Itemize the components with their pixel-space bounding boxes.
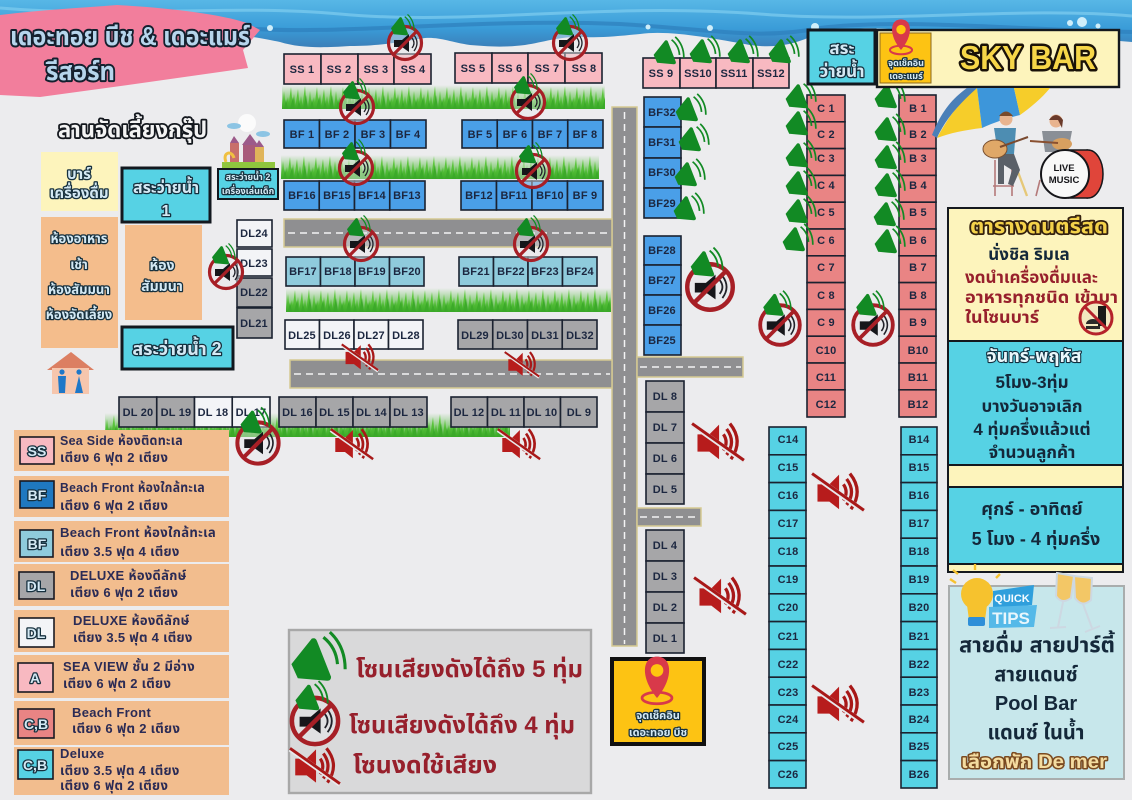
- rooms: BF 17-20: BF18: [324, 266, 352, 278]
- rooms: C 14-26: C18: [778, 546, 798, 558]
- icons: 4 pm noise limit markers: [210, 14, 893, 464]
- legend: BF six foot: เตียง 6 ฟุต 2 เตียง: [60, 498, 168, 513]
- legend: DL 3.5 foot: DL: [27, 625, 46, 641]
- panel: sound zone legend: [289, 630, 591, 793]
- rooms: DL 16-13: DL 16: [282, 407, 313, 419]
- rooms: B 1-12: B 5: [909, 207, 927, 219]
- panel: seminar room: [125, 225, 202, 320]
- rooms: SS 1-4: SS 1: [290, 64, 314, 76]
- rooms: DL 8-5: DL 6: [653, 453, 677, 465]
- rooms: SS 5-8: SS 8: [572, 63, 596, 75]
- icons: loud zone speakers above SS rooms: [654, 36, 799, 64]
- rooms: DL 24-21: DL22: [240, 287, 268, 299]
- rooms: SS 9-12: SS10: [684, 68, 712, 80]
- rooms: B 14-26: B23: [909, 687, 929, 699]
- tips text: สายดื่ม สายปาร์ตี้: [959, 630, 1116, 657]
- rooms: C 1-12: C 1: [817, 103, 835, 115]
- rooms: SS 5-8: SS 5: [461, 63, 485, 75]
- panel: pool 1: 1: [162, 203, 171, 220]
- rooms: B 14-26: B16: [909, 490, 929, 502]
- rooms: BF 12-9: BF10: [536, 190, 564, 202]
- rooms: DL 8-5: DL 7: [653, 422, 677, 434]
- panel: pool 1: สระว่ายน้ำ: [133, 176, 199, 197]
- rooms: BF 28-25: [644, 236, 681, 355]
- check-in De Mer: [880, 19, 931, 83]
- rooms: C 14-26: C24: [778, 714, 799, 726]
- rooms: DL 12-9: DL 10: [527, 407, 557, 419]
- rooms: BF 16-13: BF16: [288, 190, 316, 202]
- schedule fri-sun: [948, 487, 1123, 564]
- rooms: C 14-26: C22: [778, 659, 798, 671]
- rooms: C 1-12: C 3: [817, 153, 835, 165]
- legend: C,B deluxe: [14, 746, 229, 795]
- rooms: BF 1-4: BF 3: [361, 129, 385, 141]
- legend: DL six foot: DELUXE ห้องดีลักษ์: [70, 568, 187, 583]
- rooms: DL 29-32: DL31: [531, 330, 559, 342]
- panel: restaurant and function rooms: เช้า: [70, 257, 88, 272]
- no sound: โซนงดใช้เสียง: [353, 751, 497, 779]
- panel: quick tips: [949, 564, 1124, 779]
- rooms: BF 21-24: BF23: [531, 266, 559, 278]
- rooms: C 1-12: C11: [816, 372, 836, 384]
- rooms: DL 29-32: [458, 320, 597, 349]
- rooms: DL 4-1: DL 3: [653, 571, 677, 583]
- icons: loud zone speakers beside BF rooms: [674, 94, 709, 220]
- panel: swimming pool top: ว่ายน้ำ: [819, 59, 865, 81]
- title banner: เดอะทอย บีช & เดอะแมร์: [10, 21, 250, 51]
- rooms: BF 16-13: BF13: [393, 190, 421, 202]
- rooms: C 14-26: [769, 427, 806, 788]
- rooms: BF 28-25: BF27: [648, 275, 676, 287]
- rooms: B 1-12: B 3: [909, 153, 927, 165]
- legend: SS: [14, 430, 229, 471]
- quick tips badge: TIPS: [992, 609, 1030, 628]
- rooms: BF 16-13: BF14: [358, 190, 387, 202]
- schedule mon-thu: จำนวนลูกค้า: [989, 443, 1075, 463]
- panel: check-in The Toy Beach: จุดเช็คอิน: [636, 710, 680, 722]
- panel: pool 2 with playground: สระว่ายน้ำ 2: [226, 170, 270, 182]
- check-in De Mer: เดอะแมร์: [889, 71, 923, 81]
- panel: drinks bar: [41, 152, 118, 211]
- loud until 11 pm: โซนเสียงดังได้ถึง 5 ทุ่ม: [356, 655, 583, 684]
- icon: beach umbrella: [932, 88, 1050, 138]
- panel: pool 2 with playground: เครื่องเล่นเด็ก: [222, 184, 274, 196]
- legend: C,B beach front: เตียง 6 ฟุต 2 เตียง: [72, 721, 180, 736]
- legend: A: A: [30, 670, 40, 686]
- rooms: DL 24-21: DL23: [240, 258, 268, 270]
- rooms: BF 17-20: BF17: [289, 266, 317, 278]
- rooms: DL 4-1: DL 2: [653, 602, 677, 614]
- rooms: SS 9-12: SS12: [757, 68, 785, 80]
- legend: A: เตียง 6 ฟุต 2 เตียง: [63, 676, 171, 691]
- rooms: C 14-26: C17: [778, 518, 798, 530]
- legend: SS: เตียง 6 ฟุต 2 เตียง: [60, 450, 168, 465]
- rooms: C 1-12: C 8: [817, 290, 835, 302]
- rooms: C 14-26: C25: [778, 741, 798, 753]
- panel: pool 2: [122, 327, 233, 369]
- legend: DL 3.5 foot: [14, 610, 229, 652]
- rooms: DL 29-32: DL29: [461, 330, 489, 342]
- rooms: BF 17-20: BF20: [393, 266, 421, 278]
- rooms: SS 9-12: SS11: [720, 68, 748, 80]
- schedule heading: ตารางดนตรีสด: [970, 216, 1108, 238]
- legend: A: [14, 655, 229, 698]
- panel: pool 2 with playground: [218, 169, 278, 199]
- panel: drinks bar: บาร์: [67, 166, 91, 183]
- rooms: BF 12-9: [461, 181, 603, 210]
- rooms: B 1-12: B11: [908, 372, 928, 384]
- rooms: DL 25-28: DL28: [392, 330, 420, 342]
- panel: live music schedule: [948, 208, 1123, 572]
- rooms: B 14-26: B20: [909, 602, 929, 614]
- rooms: SS 1-4: [284, 54, 431, 84]
- rooms: DL 12-9: DL 12: [454, 407, 484, 419]
- rooms: B 14-26: B22: [909, 659, 929, 671]
- rooms: DL 16-13: DL 15: [319, 407, 350, 419]
- legend: C,B deluxe: เตียง 3.5 ฟุต 4 เตียง: [60, 763, 180, 778]
- legend: BF six foot: [14, 476, 229, 517]
- icon: playground: [222, 114, 275, 168]
- legend: BF six foot: BF: [28, 487, 47, 503]
- rooms: BF 32-29: BF30: [648, 167, 676, 179]
- rooms: BF 32-29: BF29: [648, 198, 676, 210]
- rooms: B 14-26: B26: [909, 769, 929, 781]
- schedule fri-sun: ศุกร์ - อาทิตย์: [981, 499, 1083, 520]
- rooms: DL 25-28: DL25: [288, 330, 316, 342]
- rooms: B 1-12: B10: [908, 345, 928, 357]
- rooms: DL 8-5: [646, 381, 684, 504]
- tips text: แดนซ์ ในน้ำ: [987, 718, 1085, 744]
- legend: C,B deluxe: เตียง 6 ฟุต 2 เตียง: [60, 778, 168, 793]
- rooms: BF 28-25: BF28: [648, 245, 676, 257]
- icon: restroom: [47, 352, 94, 394]
- rooms: B 1-12: B12: [908, 399, 928, 411]
- icon: live music band: LIVE: [1053, 163, 1075, 174]
- rooms: BF 12-9: BF 9: [573, 190, 597, 202]
- rooms: BF 12-9: BF12: [465, 190, 493, 202]
- rooms: C 14-26: C26: [778, 769, 798, 781]
- rooms: DL 16-13: DL 13: [393, 407, 424, 419]
- icons: no sound zones: [331, 344, 864, 723]
- rooms: C 1-12: C10: [816, 345, 836, 357]
- rooms: B 1-12: B 2: [909, 129, 927, 141]
- rooms: B 14-26: B14: [909, 434, 930, 446]
- rooms: DL 20-17: DL 19: [161, 407, 191, 419]
- rooms: BF 21-24: BF22: [497, 266, 525, 278]
- panel: sky bar banner: SKY BAR: [960, 39, 1096, 76]
- rooms: BF 32-29: [644, 97, 681, 218]
- rooms: DL 20-17: DL 20: [123, 407, 153, 419]
- schedule mon-thu: 5โมง-3ทุ่ม: [995, 372, 1069, 393]
- rooms: BF 28-25: BF25: [648, 335, 676, 347]
- icon: no food: [1080, 302, 1112, 334]
- rooms: B 1-12: B 4: [909, 180, 928, 192]
- panel: swimming pool top: สระ: [829, 39, 855, 58]
- panel: check-in The Toy Beach: [612, 657, 704, 744]
- rooms: BF 5-8: [462, 120, 603, 148]
- rooms: SS 5-8: SS 6: [498, 63, 522, 75]
- water background: [0, 0, 1132, 47]
- rooms: DL 12-9: DL 11: [491, 407, 521, 419]
- rooms: C 14-26: C23: [778, 687, 798, 699]
- panel: swimming pool top: [808, 30, 875, 84]
- rooms: BF 17-20: [286, 257, 424, 286]
- rooms: DL 12-9: DL 9: [567, 407, 591, 419]
- rooms: B 14-26: B21: [909, 631, 929, 643]
- rooms: B 14-26: B15: [909, 462, 929, 474]
- legend: BF 3.5 foot: [14, 521, 229, 562]
- tips text: สายแดนซ์: [994, 664, 1078, 686]
- rooms: BF 16-13: BF15: [323, 190, 351, 202]
- rooms: BF 1-4: BF 2: [325, 129, 349, 141]
- panel: restaurant and function rooms: ห้องจัดเลี้ยง: [46, 305, 112, 322]
- rooms: SS 1-4: SS 2: [327, 64, 351, 76]
- loud until 10 pm: [292, 681, 575, 744]
- rooms: DL 4-1: [646, 530, 684, 653]
- rooms: C 1-12: C 2: [817, 129, 835, 141]
- rooms: SS 9-12: SS 9: [649, 68, 673, 80]
- rooms: DL 25-28: DL26: [323, 330, 351, 342]
- rooms: B 14-26: B18: [909, 546, 929, 558]
- grass strips: [105, 85, 611, 437]
- rooms: C 1-12: C 5: [817, 207, 835, 219]
- rooms: BF 5-8: BF 8: [573, 129, 597, 141]
- title banner: [0, 5, 260, 97]
- panel: seminar room: สัมมนา: [141, 278, 183, 294]
- legend: C,B beach front: Beach Front: [72, 705, 152, 720]
- panel: pool 1: [122, 168, 210, 222]
- rooms: BF 5-8: BF 7: [538, 129, 562, 141]
- legend: BF 3.5 foot: BF: [28, 536, 47, 552]
- rooms: BF 28-25: BF26: [648, 305, 676, 317]
- rooms: SS 5-8: [455, 53, 602, 83]
- rooms: B 14-26: B24: [909, 714, 930, 726]
- rooms: SS 1-4: SS 4: [401, 64, 426, 76]
- rooms: B 1-12: B 9: [909, 317, 927, 329]
- quick tips badge: QUICK: [994, 593, 1030, 605]
- legend: DL six foot: DL: [27, 578, 46, 594]
- rooms: SS 9-12: [643, 58, 789, 88]
- rooms: BF 32-29: BF32: [648, 107, 676, 119]
- loud until 11 pm: [291, 632, 583, 684]
- panel: drinks bar: เครื่องดื่ม: [49, 182, 109, 202]
- roads: [284, 107, 743, 646]
- legend: DL 3.5 foot: DELUXE ห้องดีลักษ์: [73, 613, 190, 628]
- title banner: รีสอร์ท: [46, 56, 115, 86]
- rooms: DL 24-21: [237, 220, 272, 338]
- legend: BF six foot: Beach Front ห้องใกล้ทะเล: [60, 480, 205, 495]
- rooms: B 14-26: B17: [909, 518, 929, 530]
- rooms: B 14-26: [901, 427, 937, 788]
- legend: A: SEA VIEW ชั้น 2 มีอ่าง: [63, 657, 195, 674]
- rooms: BF 32-29: BF31: [648, 137, 676, 149]
- schedule mon-thu: 4 ทุ่มครึ่งแล้วแต่: [973, 417, 1091, 440]
- legend: C,B beach front: C,B: [24, 716, 48, 732]
- rooms: DL 24-21: DL24: [240, 228, 269, 240]
- legend: SS: SS: [28, 443, 46, 459]
- panel: restaurant and function rooms: ห้องอาหาร: [50, 231, 108, 246]
- legend: C,B deluxe: Deluxe: [60, 746, 104, 761]
- rooms: B 14-26: B19: [909, 574, 929, 586]
- legend: DL 3.5 foot: เตียง 3.5 ฟุต 4 เตียง: [73, 630, 193, 645]
- tips text: [959, 630, 1116, 744]
- panel: room type legend: [14, 430, 229, 795]
- tips highlight: เลือกพัก De mer: [961, 752, 1108, 773]
- rooms: DL 12-9: [451, 397, 597, 427]
- outside food warning: งดนำเครื่องดื่มและ: [965, 265, 1098, 287]
- rooms: C 1-12: C 7: [817, 262, 835, 274]
- rooms: BF 12-9: BF11: [500, 190, 528, 202]
- rooms: B 1-12: B 1: [909, 103, 927, 115]
- rooms: B 14-26: B25: [909, 741, 929, 753]
- rooms: DL 20-17: DL 17: [236, 407, 266, 419]
- legend: DL six foot: เตียง 6 ฟุต 2 เตียง: [70, 585, 178, 600]
- rooms: B 1-12: B 6: [909, 235, 927, 247]
- rooms: C 14-26: C14: [778, 434, 799, 446]
- rooms: B 1-12: B 8: [909, 290, 927, 302]
- outside food warning: อาหารทุกชนิด เข้ามา: [965, 288, 1118, 308]
- quick tips badge: [989, 585, 1037, 628]
- rooms: DL 20-17: [119, 397, 270, 427]
- schedule mon-thu: จันทร์-พฤหัส: [987, 346, 1082, 366]
- rooms: DL 29-32: DL30: [496, 330, 524, 342]
- rooms: DL 24-21: DL21: [240, 318, 268, 330]
- tips text: Pool Bar: [995, 693, 1077, 715]
- loud until 10 pm: โซนเสียงดังได้ถึง 4 ทุ่ม: [349, 711, 575, 740]
- rooms: DL 4-1: DL 1: [653, 633, 677, 645]
- rooms: BF 21-24: BF21: [462, 266, 490, 278]
- outside food warning: ในโซนบาร์: [965, 308, 1039, 327]
- rooms: B 1-12: B 7: [909, 262, 927, 274]
- rooms: DL 29-32: DL32: [566, 330, 594, 342]
- check-in De Mer: จุดเช็คอิน: [888, 58, 924, 68]
- panel: sky bar banner: [877, 19, 1119, 87]
- chill note: นั่งชิล ริมเล: [988, 243, 1070, 264]
- rooms: DL 8-5: DL 8: [653, 391, 677, 403]
- legend: SS: Sea Side ห้องติดทะเล: [60, 433, 183, 448]
- legend: DL six foot: [14, 564, 229, 606]
- legend: C,B beach front: [14, 701, 229, 745]
- rooms: C 1-12: C 9: [817, 317, 835, 329]
- rooms: C 1-12: C 4: [817, 180, 836, 192]
- rooms: BF 1-4: BF 1: [290, 129, 314, 141]
- icons: loud zone speakers beside B rooms: [874, 81, 905, 253]
- rooms: C 14-26: C16: [778, 490, 798, 502]
- legend: C,B deluxe: C,B: [23, 757, 47, 773]
- rooms: BF 1-4: BF 4: [396, 129, 421, 141]
- schedule fri-sun: 5 โมง - 4 ทุ่มครึ่ง: [972, 526, 1100, 550]
- rooms: C 14-26: C21: [778, 631, 798, 643]
- rooms: BF 16-13: [284, 181, 425, 210]
- icons: loud zone speakers beside C rooms: [783, 81, 816, 251]
- heading: banquet court: ลานจัดเลี้ยงกรุ๊ป: [58, 114, 207, 143]
- panel: seminar room: ห้อง: [149, 257, 175, 273]
- rooms: C 14-26: C19: [778, 574, 798, 586]
- icon: live music band: [983, 112, 1103, 198]
- rooms: C 14-26: C15: [778, 462, 798, 474]
- no sound: [290, 748, 497, 785]
- rooms: DL 25-28: [285, 320, 423, 349]
- schedule mon-thu: [948, 341, 1123, 465]
- panel: restaurant and function rooms: [41, 217, 118, 348]
- rooms: DL 25-28: DL27: [357, 330, 385, 342]
- panel: check-in The Toy Beach: เดอะทอย บีช: [629, 727, 687, 739]
- rooms: DL 20-17: DL 18: [198, 407, 228, 419]
- rooms: DL 4-1: DL 4: [653, 540, 678, 552]
- rooms: DL 8-5: DL 5: [653, 484, 677, 496]
- rooms: SS 5-8: SS 7: [535, 63, 559, 75]
- rooms: BF 5-8: BF 6: [503, 129, 527, 141]
- rooms: DL 16-13: [279, 397, 427, 427]
- rooms: C 1-12: [807, 95, 845, 417]
- rooms: DL 16-13: DL 14: [356, 407, 388, 419]
- rooms: C 1-12: C 6: [817, 235, 835, 247]
- icon: live music band: MUSIC: [1049, 175, 1079, 186]
- outside food warning: [965, 265, 1118, 327]
- rooms: BF 21-24: BF24: [566, 266, 595, 278]
- rooms: BF 1-4: [284, 120, 426, 148]
- rooms: B 1-12: [899, 95, 936, 417]
- rooms: SS 1-4: SS 3: [364, 64, 388, 76]
- legend: BF 3.5 foot: Beach Front ห้องใกล้ทะเล: [60, 525, 216, 540]
- rooms: C 1-12: C12: [816, 399, 836, 411]
- legend: BF 3.5 foot: เตียง 3.5 ฟุต 4 เตียง: [60, 544, 180, 559]
- rooms: BF 5-8: BF 5: [468, 129, 492, 141]
- icon: champagne glasses: [1050, 573, 1100, 632]
- panel: pool 2: สระว่ายน้ำ 2: [132, 336, 222, 359]
- rooms: BF 17-20: BF19: [358, 266, 386, 278]
- rooms: C 14-26: C20: [778, 602, 798, 614]
- rooms: BF 21-24: [459, 257, 597, 286]
- schedule mon-thu: บางวันอาจเลิก: [981, 397, 1083, 416]
- panel: restaurant and function rooms: ห้องสัมมนา: [48, 282, 110, 297]
- icon: light bulb: [950, 564, 1000, 626]
